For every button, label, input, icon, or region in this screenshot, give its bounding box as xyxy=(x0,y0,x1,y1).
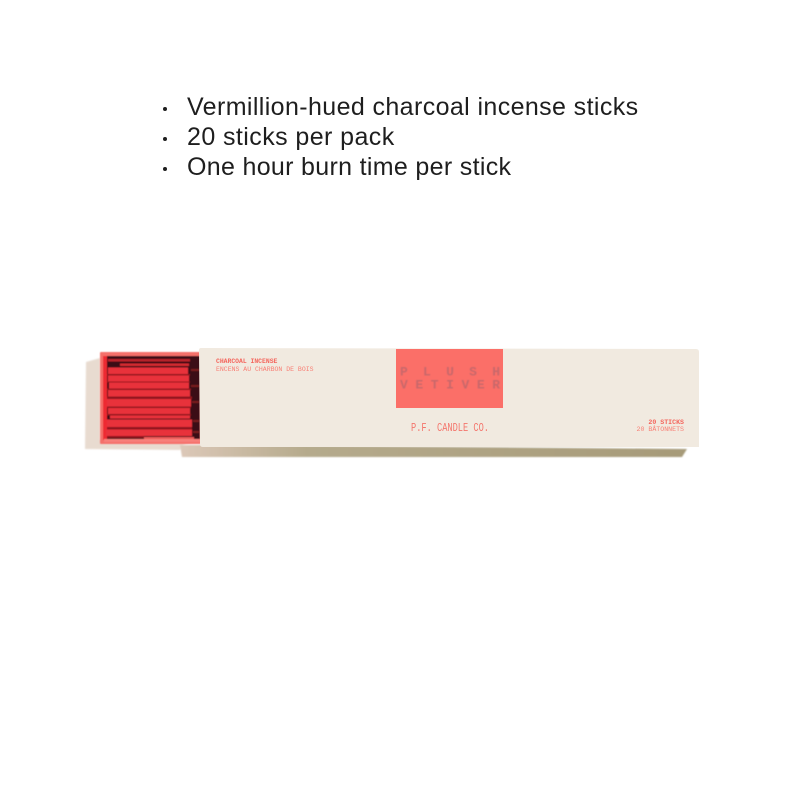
open tray with sticks xyxy=(100,352,201,444)
box sleeve xyxy=(199,348,699,447)
sleeve label: charcoal incense: CHARCOAL INCENSE xyxy=(216,358,278,365)
stick count xyxy=(637,419,684,433)
gaps between sticks xyxy=(107,374,192,438)
bullet: vermillion-hued sticks: Vermillion-hued charcoal incense sticks xyxy=(187,93,639,121)
coral label: plush vetiver: PLUSH xyxy=(400,364,500,380)
bullet: burn time: One hour burn time per stick xyxy=(187,153,511,181)
sleeve label: charcoal incense xyxy=(216,358,314,373)
stick count: 20 STICKS xyxy=(648,419,684,426)
coral label: plush vetiver: VETIVER xyxy=(400,378,500,392)
shadow under box xyxy=(85,358,687,457)
coral label: plush vetiver xyxy=(396,349,503,408)
sleeve label: charcoal incense: ENCENS AU CHARBON DE BOIS xyxy=(216,366,314,373)
stick ends behind the sleeve xyxy=(191,369,199,433)
stick count: 20 BÂTONNETS xyxy=(637,425,684,433)
brand name: P.F. CANDLE CO. xyxy=(411,422,489,435)
bullet: sticks per pack: 20 sticks per pack xyxy=(187,123,395,151)
incense sticks xyxy=(106,359,194,439)
bullet list xyxy=(163,93,639,181)
